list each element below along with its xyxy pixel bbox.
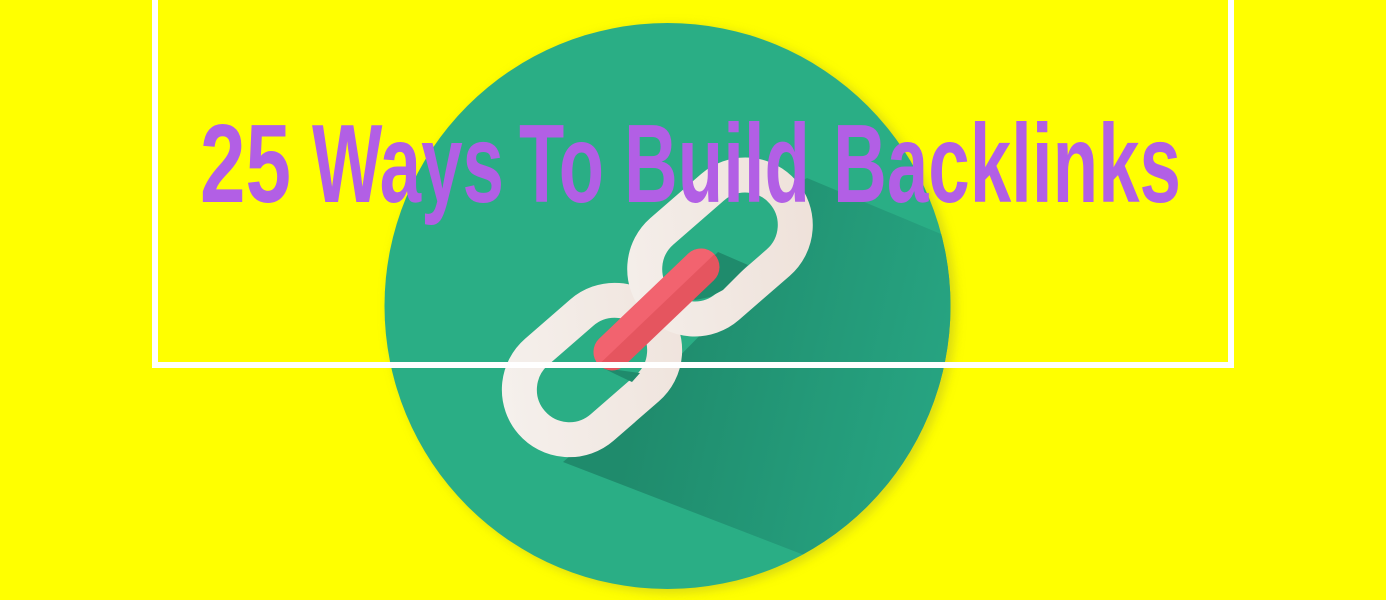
title: Ways	[312, 102, 504, 226]
icon: chain link upper	[624, 154, 816, 340]
title: Backlinks	[833, 102, 1181, 226]
title: 25	[200, 102, 291, 226]
icon: red link bar	[612, 267, 701, 352]
circle soft shadow	[388, 25, 956, 593]
white frame	[155, 0, 1231, 365]
green circle	[384, 23, 950, 589]
green circle badge with chain icon	[384, 23, 960, 600]
long shadow of chain	[563, 178, 950, 554]
icon: chain link lower	[499, 280, 685, 460]
infographic canvas	[152, 0, 1234, 596]
title: To	[519, 102, 604, 226]
red bar shadow upper	[680, 252, 748, 300]
red bar shadow lower	[603, 368, 640, 382]
title: Build	[624, 102, 810, 226]
title	[200, 102, 1181, 226]
